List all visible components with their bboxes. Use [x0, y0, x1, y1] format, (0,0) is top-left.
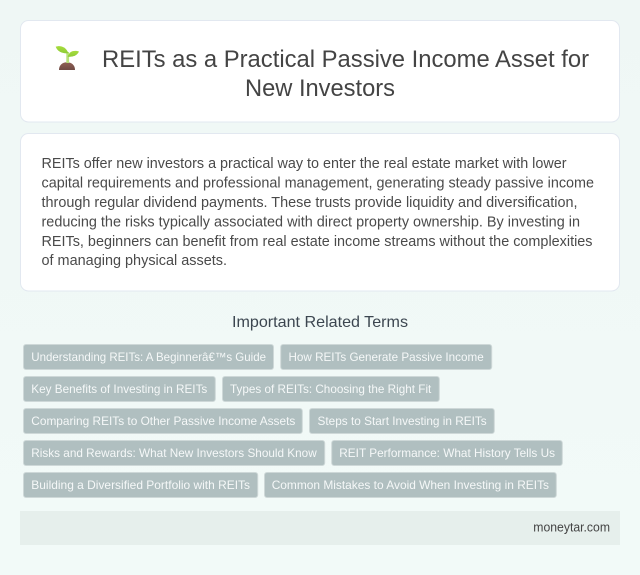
summary text: through regular dividend payments. These trusts provide liquidity and diversification,: [42, 194, 578, 211]
icon: sprout: [56, 46, 79, 70]
footer: moneytar.com: [533, 520, 610, 535]
chip: understanding: [24, 344, 274, 370]
chip: comparing: [24, 408, 302, 434]
chip: performance: [332, 440, 562, 466]
chip: risks: Risks and Rewards: What New Investors Should Know: [31, 446, 317, 460]
related terms chips: [24, 344, 562, 498]
summary text: [42, 155, 594, 269]
chip: portfolio: [24, 472, 258, 498]
chip: understanding: Understanding REITs: A Beginnerâ€™s Guide: [31, 350, 266, 364]
summary text: reducing the risks typically associated with direct property ownership. By investing in: [42, 214, 580, 231]
panel: title card: [20, 20, 620, 122]
footer: [20, 511, 620, 545]
title: REITs as a Practical Passive Income Asset for: [102, 46, 589, 73]
chip: mistakes: Common Mistakes to Avoid When Investing in REITs: [272, 478, 549, 492]
chip: portfolio: Building a Diversified Portfolio with REITs: [31, 478, 250, 492]
chip: types: [222, 376, 439, 402]
chip: risks: [24, 440, 325, 466]
chip: performance: REIT Performance: What History Tells Us: [339, 446, 555, 460]
chip: comparing: Comparing REITs to Other Passive Income Assets: [31, 414, 295, 428]
chip: key benefits: Key Benefits of Investing in REITs: [31, 382, 207, 396]
chip: passive income: [281, 344, 492, 370]
summary text: REITs offer new investors a practical way to enter the real estate market with lower: [42, 155, 566, 172]
chip: types: Types of REITs: Choosing the Right Fit: [230, 382, 432, 396]
title: [102, 46, 589, 102]
chip: steps: [310, 408, 494, 434]
summary text: REITs, beginners can benefit from real estate income streams without the complexities: [42, 233, 592, 250]
chip: steps: Steps to Start Investing in REITs: [318, 414, 487, 428]
title: New Investors: [245, 75, 395, 102]
chip: key benefits: [24, 376, 215, 402]
chip: mistakes: [264, 472, 556, 498]
summary text: of managing physical assets.: [42, 252, 227, 269]
chip: passive income: How REITs Generate Passive Income: [288, 350, 484, 364]
summary text: capital requirements and professional management, generating steady passive income: [42, 175, 594, 192]
heading: related terms: Important Related Terms: [232, 314, 408, 331]
panel: summary: [20, 134, 620, 291]
